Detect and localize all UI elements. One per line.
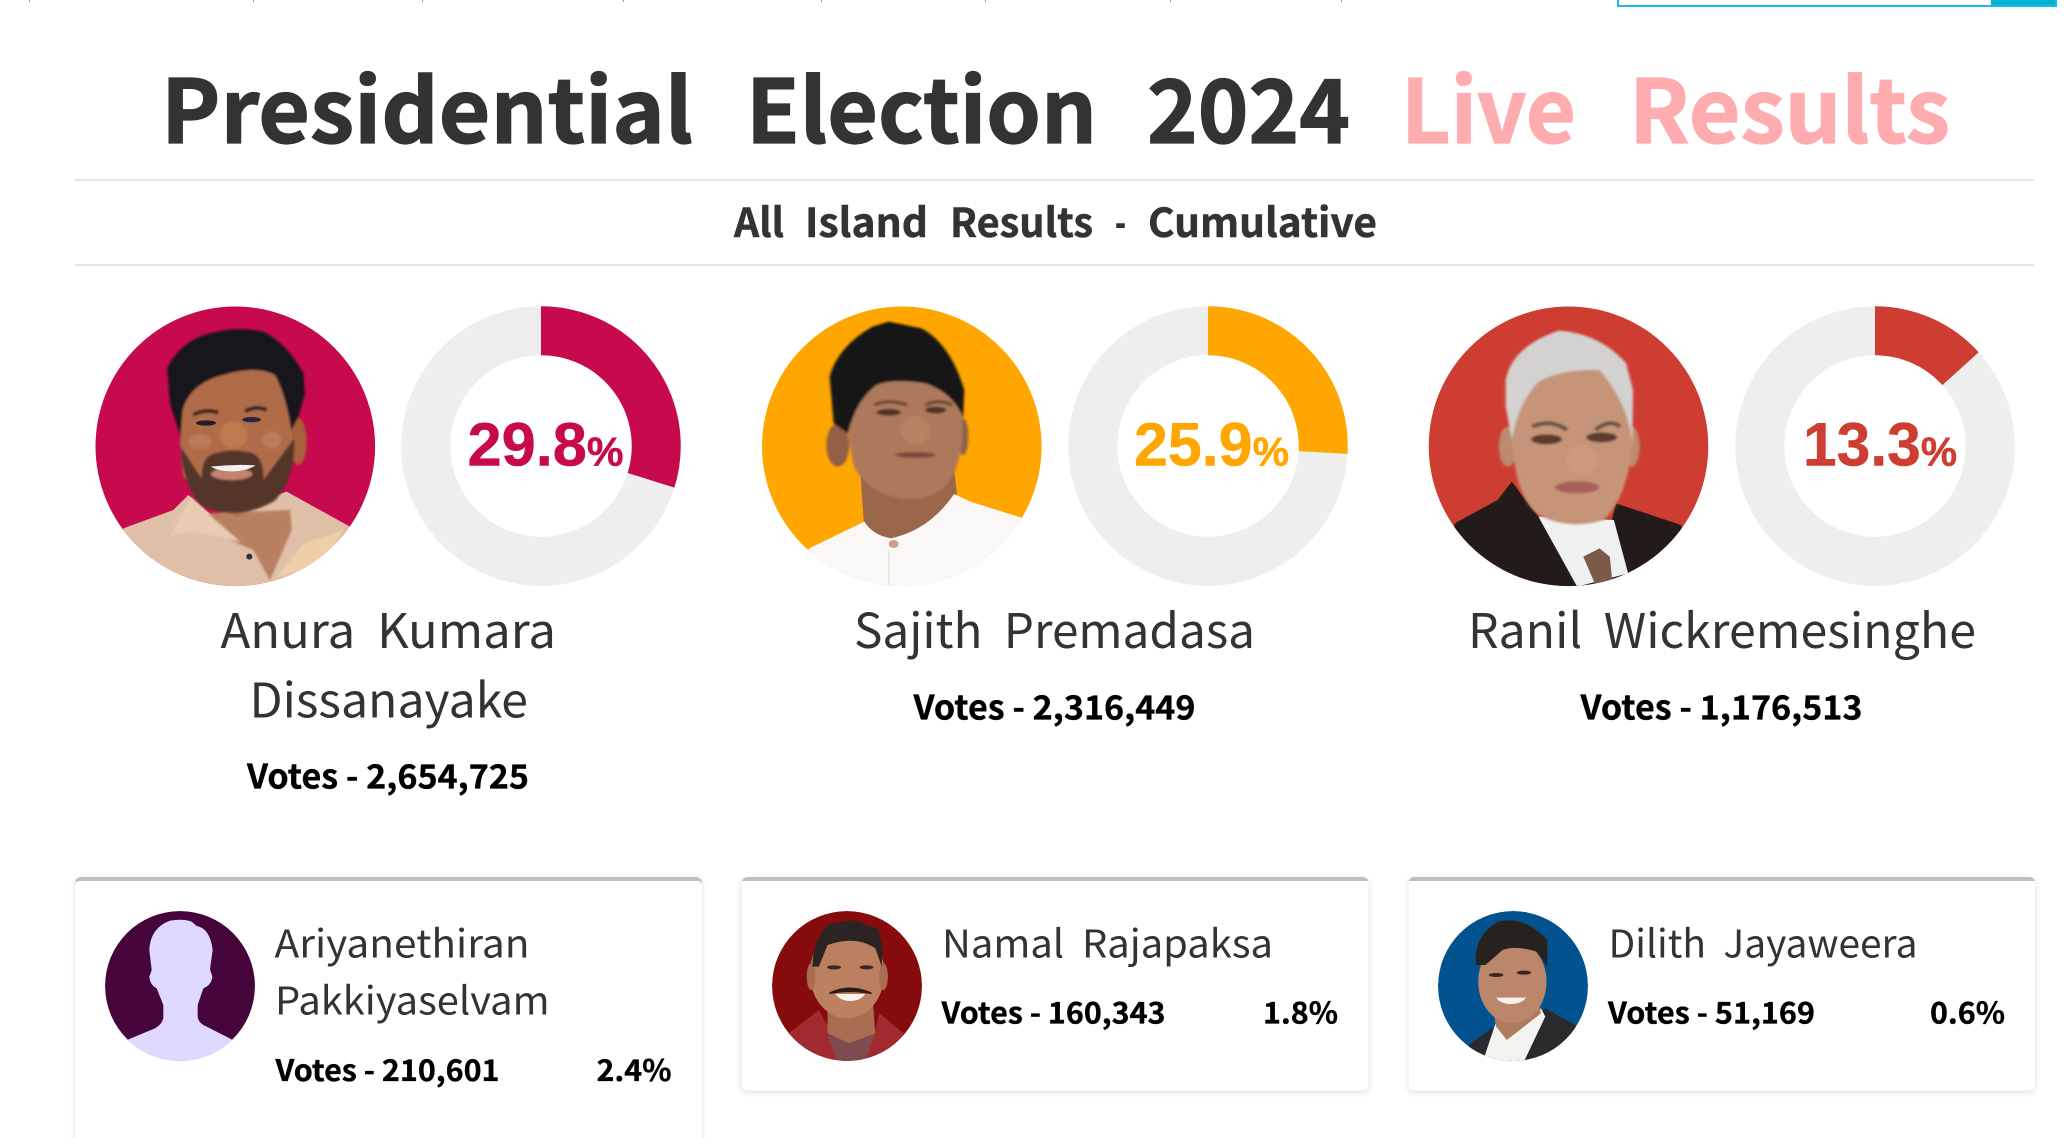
card: Dilith Jayaweera (1408, 877, 2035, 1090)
avatar: Dilith (1438, 911, 1588, 1070)
donut chart: 29.8%: 29.8% (468, 410, 624, 478)
candidate name: Dilith Jayaweera (1608, 914, 1918, 970)
donut chart: 13.3%: 13.3% (1803, 410, 1957, 478)
vote count: Votes - 1,176,513 (1579, 680, 1862, 730)
panel: Sajith Premadasa (762, 306, 1323, 730)
title: 2024 (1147, 42, 1350, 169)
donut chart: 25.9%: 25.9% (1134, 410, 1289, 478)
panel: Anura Kumara Dissanayake (95, 306, 656, 798)
vote count: Votes - 160,343 (940, 990, 1166, 1032)
candidate name: Sajith Premadasa (854, 592, 1255, 662)
donut chart: 29.8% (426, 331, 656, 561)
title (161, 42, 1950, 169)
subtitle: - (1115, 191, 1126, 249)
donut chart: 25.9% (1093, 331, 1323, 561)
candidate name: Dissanayake (250, 662, 528, 732)
percentage: 1.8% (1263, 990, 1338, 1032)
title: Election (746, 42, 1097, 169)
vote count: Votes - 51,169 (1607, 990, 1815, 1032)
card: Ariyanethiran Pakkiyaselvam (75, 877, 702, 1138)
card: Namal Rajapaksa (742, 877, 1369, 1090)
title: Live (1401, 42, 1576, 169)
vote count: Votes - 2,316,449 (912, 680, 1196, 730)
avatar: Namal (772, 911, 922, 1070)
top navigation remnants (29, 0, 2057, 7)
subtitle: Results (950, 191, 1093, 249)
candidate name: Namal Rajapaksa (942, 914, 1273, 970)
vote count: Votes - 210,601 (274, 1048, 500, 1090)
subtitle: Island (805, 191, 928, 249)
subtitle: Cumulative (1148, 191, 1377, 249)
title: Presidential (161, 42, 693, 169)
panel: Ranil Wickremesinghe (1428, 306, 1990, 730)
portrait: Sajith (762, 306, 1044, 590)
portrait: Anura (95, 306, 375, 600)
title: Results (1629, 42, 1950, 169)
subtitle (733, 191, 1377, 249)
candidate name: Ariyanethiran (274, 914, 530, 970)
candidate name: Anura Kumara (220, 592, 556, 662)
donut chart: 13.3% (1760, 331, 1990, 561)
candidate name: Ranil Wickremesinghe (1468, 592, 1976, 662)
vote count: Votes - 2,654,725 (246, 750, 529, 798)
avatar: silhouette (105, 911, 255, 1070)
candidate name: Pakkiyaselvam (275, 970, 550, 1026)
candidate name (220, 592, 556, 732)
percentage: 0.6% (1930, 990, 2005, 1032)
percentage: 2.4% (596, 1048, 672, 1090)
portrait: Ranil (1428, 306, 1708, 590)
subtitle: All (733, 191, 784, 249)
candidate name (274, 914, 550, 1026)
